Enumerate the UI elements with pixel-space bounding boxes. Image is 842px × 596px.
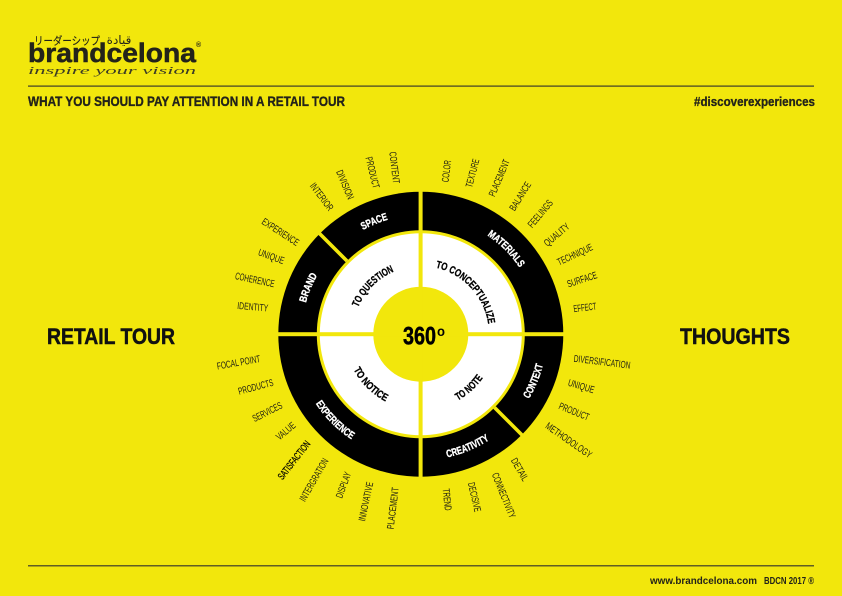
heading: WHAT YOU SHOULD PAY ATTENTION IN A RETAIL TOUR <box>28 94 345 109</box>
labels: brand and space: CONTENT <box>386 151 401 184</box>
labels: context and creativity: METHODOLOGY <box>543 421 594 461</box>
segment: experience: EXPERIENCE <box>316 400 356 440</box>
wheel diagram <box>278 192 564 477</box>
logo <box>28 33 202 77</box>
labels: context and creativity: CONNECTIVITY <box>489 471 517 520</box>
labels: context and creativity: DECISIVE <box>465 481 482 513</box>
labels: context and creativity: DIVERSIFICATION <box>573 354 631 372</box>
logo: arabic tagline: قيادة <box>107 33 131 47</box>
inner: to question: TO QUESTION <box>352 265 394 306</box>
labels: experience: INTERGRATION <box>298 457 331 504</box>
inner yellow ring <box>317 230 525 438</box>
labels: materials: BALANCE <box>508 180 534 213</box>
labels: context and creativity: DETAIL <box>508 456 530 484</box>
labels: context and creativity <box>440 354 631 520</box>
labels: brand and space: DIVISION <box>333 169 355 201</box>
inner: to notice: TO NOTICE <box>354 366 389 402</box>
labels: experience: FOCAL POINT <box>216 354 261 373</box>
hashtag: #discoverexperiences <box>694 95 815 109</box>
labels: brand and space <box>234 151 401 315</box>
inner: to note: TO NOTE <box>454 374 483 400</box>
labels: materials: TEXTURE <box>464 158 482 189</box>
labels: experience: DISPLAY <box>335 471 354 500</box>
footer: website: www.brandcelona.com <box>649 575 757 587</box>
labels: materials: SURFACE <box>566 270 599 290</box>
logo: wordmark: brandcelona <box>28 38 197 68</box>
centre label: degree mark: o <box>437 323 445 339</box>
outer black ring <box>278 192 563 477</box>
logo: japanese tagline: リーダーシップ <box>34 34 100 48</box>
white ring <box>320 233 522 435</box>
labels: materials: QUALITY <box>542 221 572 249</box>
segment: brand: BRAND <box>298 273 316 302</box>
labels: materials <box>441 158 599 315</box>
labels: materials: COLOR <box>441 160 454 183</box>
labels: context and creativity: PRODUCT <box>557 401 591 423</box>
labels: experience: VALUE <box>274 420 298 443</box>
labels: context and creativity: TREND <box>440 488 453 511</box>
labels: experience: PRODUCTS <box>237 378 275 398</box>
labels: brand and space: EXPERIENCE <box>259 217 301 249</box>
labels: brand and space: IDENTITY <box>237 301 269 315</box>
labels: materials: TECHNIQUE <box>556 242 595 268</box>
inner: to conceptualize: TO CONCEPTUALIZE <box>437 260 496 324</box>
right heading: thoughts: THOUGHTS <box>680 324 790 349</box>
labels: brand and space: INTERIOR <box>307 181 335 213</box>
labels: brand and space: COHERENCE <box>234 271 276 290</box>
labels: brand and space: UNIQUE <box>256 248 286 267</box>
segment: space: SPACE <box>360 212 388 230</box>
labels: experience: INNOVATIVE <box>357 481 376 522</box>
footer: copyright: BDCN 2017 ® <box>764 576 814 587</box>
segment: context: CONTEXT <box>523 362 543 398</box>
labels: materials: FEELINGS <box>526 198 556 230</box>
labels: materials: EFFECT <box>573 301 597 315</box>
labels: context and creativity: UNIQUE <box>566 378 596 396</box>
labels: experience: SERVICES <box>251 400 285 425</box>
labels: experience: SATISFACTION <box>276 439 313 482</box>
labels: materials: PLACEMENT <box>487 158 513 198</box>
logo: registered mark: ® <box>196 41 202 49</box>
segment: materials: MATERIALS <box>488 230 525 267</box>
labels: brand and space: PRODUCT <box>362 156 381 190</box>
centre disc <box>373 287 468 382</box>
logo: handwritten slogan: inspire your vision <box>28 65 197 77</box>
segment: creativity: CREATIVITY <box>446 434 488 458</box>
labels: experience: PLACEMENT <box>386 487 402 530</box>
labels: experience <box>216 354 402 530</box>
centre label: 360 degrees: 360 <box>403 322 436 350</box>
left heading: retail tour: RETAIL TOUR <box>47 324 175 349</box>
